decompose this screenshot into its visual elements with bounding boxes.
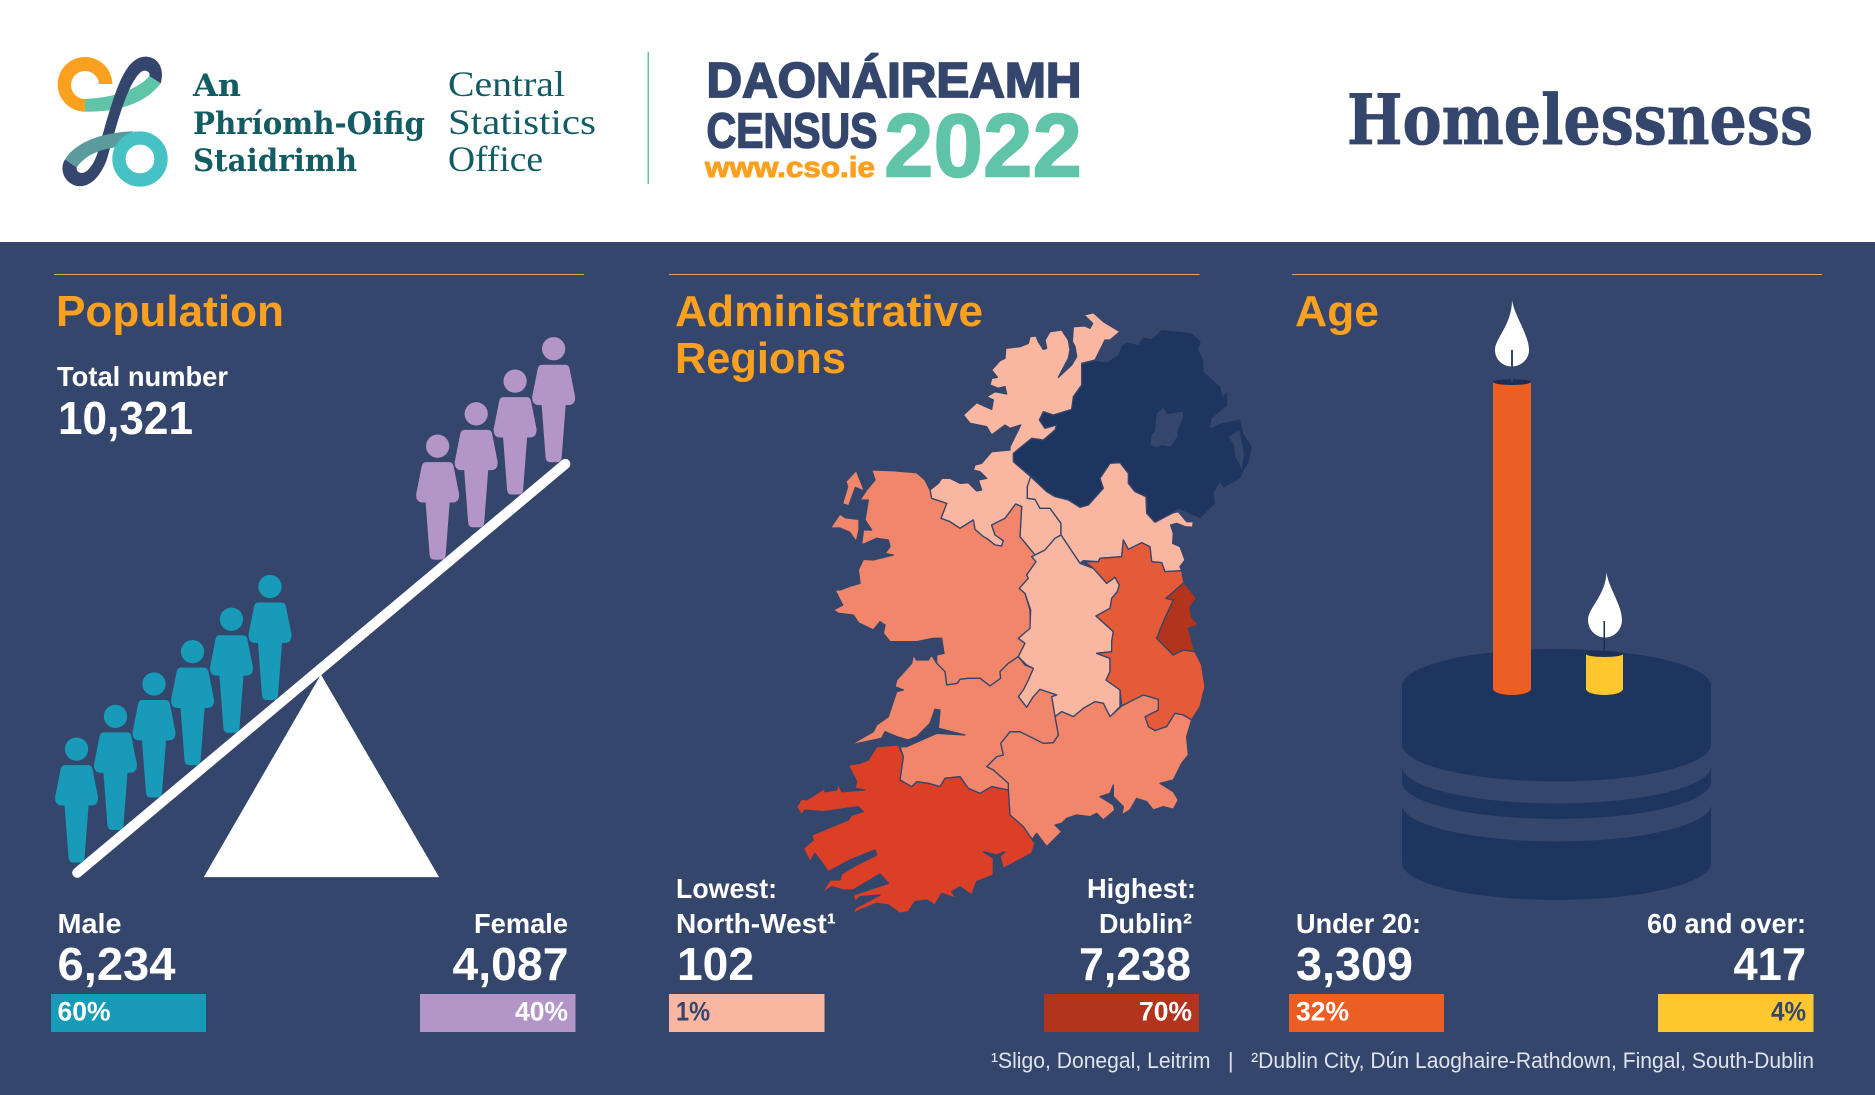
lowest stat: Lowest: xyxy=(676,873,777,904)
female stat: 4,087 xyxy=(452,938,568,990)
map of Ireland by region xyxy=(797,313,1252,913)
panel: administrative regions xyxy=(669,274,1252,1032)
under 20 stat xyxy=(1289,908,1444,1032)
cake illustration xyxy=(1402,649,1711,900)
male stat: 60% xyxy=(58,996,110,1026)
total number value: 10,321 xyxy=(58,392,193,444)
logo text: Irish name: An xyxy=(192,68,241,104)
60 and over stat: 60 and over: xyxy=(1647,908,1806,939)
female stat: 40% xyxy=(515,996,568,1026)
Mid-West region xyxy=(850,655,1058,793)
logo text: English name: Statistics xyxy=(448,102,596,142)
60 and over stat xyxy=(1647,908,1814,1032)
lowest stat xyxy=(669,873,836,1032)
highest stat: Highest: xyxy=(1087,873,1196,904)
Border region xyxy=(1027,463,1193,572)
heading: administrative regions xyxy=(675,287,983,383)
logo text: Irish name: Phríomh-Oifig xyxy=(193,106,425,142)
logo text: Irish name: Staidrimh xyxy=(193,143,357,179)
census 2022 logo: CENSUS xyxy=(706,104,878,158)
census 2022 logo: DAONÁIREAMH xyxy=(706,54,1082,108)
lowest stat: 102 xyxy=(677,938,754,990)
highest stat: Dublin² xyxy=(1099,908,1192,939)
60 and over stat: 4% xyxy=(1771,996,1806,1026)
highest stat: 70% xyxy=(1139,996,1192,1026)
panel: age xyxy=(1289,274,1822,1032)
female stat xyxy=(420,908,576,1032)
heading: age: Age xyxy=(1295,287,1379,336)
Dublin region xyxy=(1157,583,1198,655)
male stat: 6,234 xyxy=(58,938,176,990)
highest stat: 7,238 xyxy=(1079,938,1191,990)
under 20 stat: 3,309 xyxy=(1296,938,1413,990)
South-West region xyxy=(797,745,1035,913)
census 2022 logo: 2022 xyxy=(884,96,1082,196)
total number label: Total number xyxy=(57,361,228,392)
seesaw with people xyxy=(55,337,575,877)
Midlands region xyxy=(1018,535,1120,717)
North-West region xyxy=(930,313,1120,555)
main dark background panel xyxy=(0,242,1875,1095)
male stat xyxy=(51,908,206,1032)
census 2022 logo: www.cso.ie xyxy=(704,152,875,184)
logo text: Irish name xyxy=(192,68,425,179)
male stat: Male xyxy=(58,908,122,939)
footnote: ¹Sligo, Donegal, Leitrim | ²Dublin City, Dún Laoghaire-Rathdown, Fingal, South-Dublin xyxy=(991,1048,1814,1073)
heading: administrative regions: Administrative xyxy=(675,287,983,336)
candle: under 20 xyxy=(1493,300,1531,695)
logo text: English name: Office xyxy=(448,139,543,179)
logo text: English name: Central xyxy=(448,64,565,104)
census 2022 logo xyxy=(704,54,1082,196)
candle: 60 and over xyxy=(1586,572,1623,695)
under 20 stat: Under 20: xyxy=(1296,908,1421,939)
logo: CSO knot mark xyxy=(58,57,162,186)
panel: population xyxy=(51,274,584,1032)
heading: population: Population xyxy=(56,287,284,336)
female stat: Female xyxy=(474,908,568,939)
under 20 stat: 32% xyxy=(1296,996,1349,1026)
highest stat xyxy=(1044,873,1199,1032)
logo text: English name xyxy=(448,64,596,179)
lowest stat: North-West¹ xyxy=(676,908,836,939)
lowest stat: 1% xyxy=(676,996,710,1026)
Mid-East region xyxy=(1085,540,1205,731)
heading: administrative regions: Regions xyxy=(675,334,846,383)
Northern Ireland xyxy=(1013,330,1252,522)
South-East region xyxy=(987,695,1192,847)
West region xyxy=(832,470,1036,686)
header background xyxy=(0,0,1875,242)
60 and over stat: 417 xyxy=(1734,938,1806,990)
